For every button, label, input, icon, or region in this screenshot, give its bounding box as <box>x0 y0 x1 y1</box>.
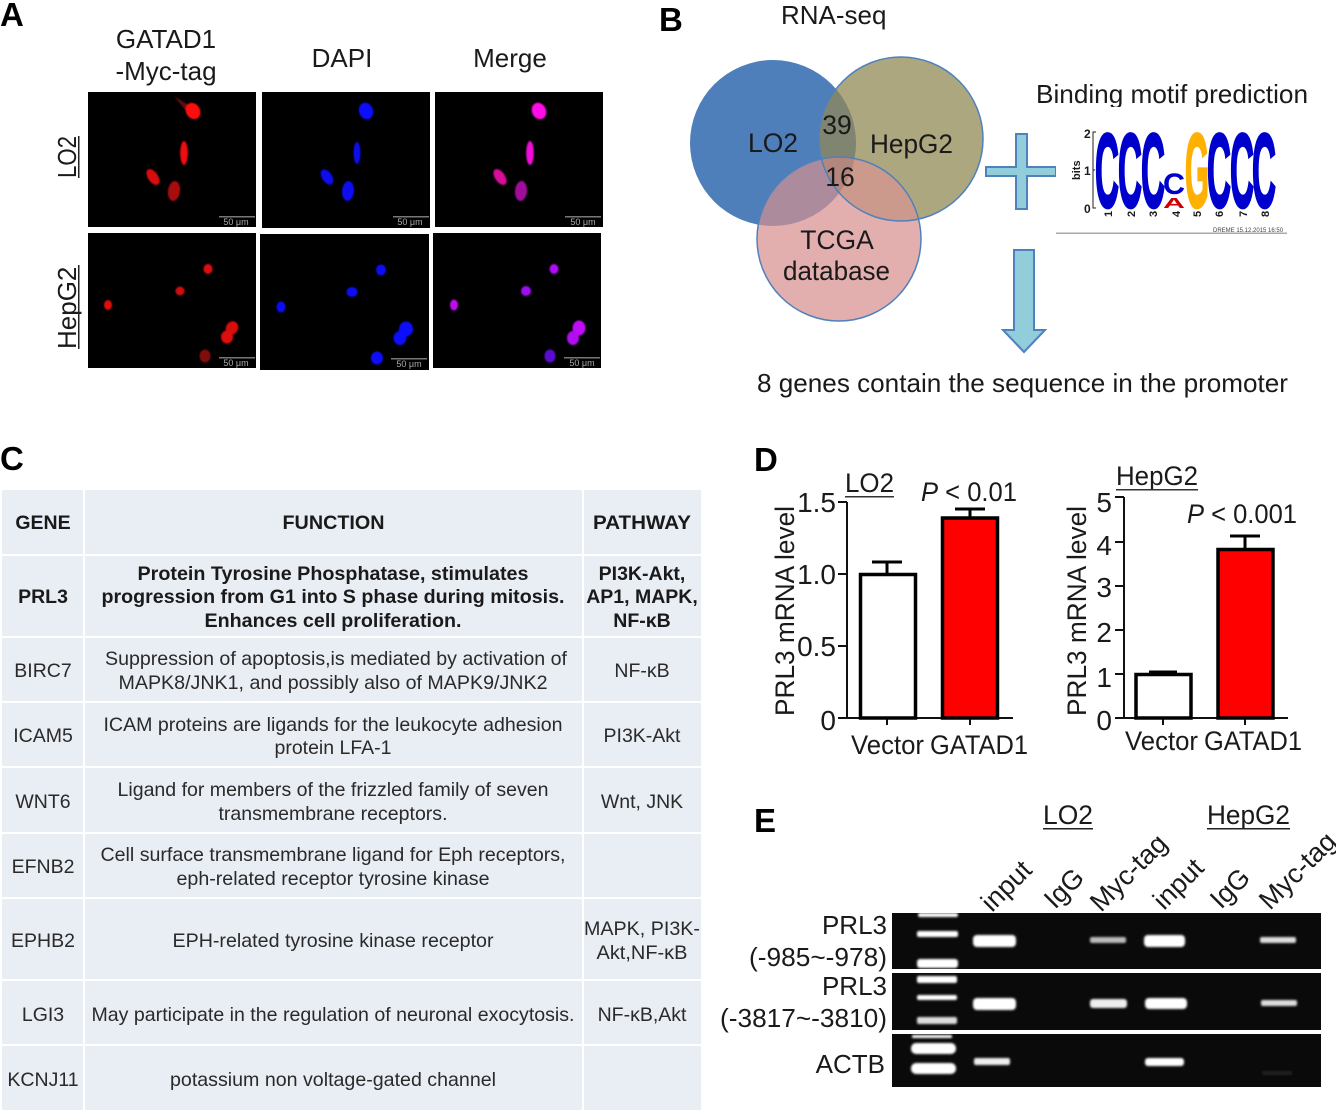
row EPHB2: MAPK, PI3K- <box>584 918 700 940</box>
bar chart LO2 <box>770 468 1028 760</box>
row ICAM5: protein LFA-1 <box>274 737 392 759</box>
row LGI3: NF-κB,Akt <box>598 1004 687 1026</box>
bar chart HepG2: GATAD1 <box>1204 726 1302 756</box>
micrograph LO2 Merge: 50 μm <box>570 217 596 227</box>
sequence logo: 0 <box>1084 202 1091 216</box>
micrograph HepG2 Merge: 50 μm <box>569 358 595 368</box>
bar chart LO2: PRL3 mRNA level <box>770 506 800 716</box>
row BIRC7: NF-κB <box>614 660 670 682</box>
bar chart HepG2: 5 <box>1096 487 1112 518</box>
sequence logo: G <box>1185 114 1209 230</box>
lane labels <box>975 826 1336 917</box>
row ICAM5: ICAM proteins are ligands for the leukocyte adhesion <box>104 714 562 736</box>
sequence logo: 5 <box>1192 211 1204 217</box>
row KCNJ11: potassium non voltage-gated channel <box>170 1069 496 1091</box>
sequence logo: C <box>1252 114 1276 230</box>
arrow down <box>1003 250 1045 352</box>
row label LO2: LO2 <box>52 136 82 178</box>
panel D: bar charts <box>754 441 1302 760</box>
row LGI3: LGI3 <box>22 1004 64 1026</box>
Venn labels <box>748 110 953 286</box>
row EFNB2: EFNB2 <box>12 856 74 878</box>
micrograph HepG2 GATAD1 <box>88 233 256 368</box>
gel row labels: ACTB <box>816 1049 885 1079</box>
bar chart LO2: P < 0.01 <box>921 477 1017 507</box>
table header row: PATHWAY <box>593 512 691 534</box>
row BIRC7: BIRC7 <box>14 660 72 682</box>
sequence logo: DREME 15.12.2015 16:50 <box>1213 228 1284 234</box>
row ICAM5: ICAM5 <box>13 725 73 747</box>
micrograph LO2 DAPI: 50 μm <box>397 217 423 227</box>
row PRL3: Protein Tyrosine Phosphatase, stimulates <box>138 563 529 585</box>
row PRL3 <box>18 563 698 632</box>
row LGI3: May participate in the regulation of neuronal exocytosis. <box>92 1004 574 1026</box>
bar chart LO2: GATAD1 <box>930 730 1028 760</box>
sequence logo: C <box>1141 114 1165 230</box>
group labels: LO2 <box>1043 800 1093 830</box>
bar chart LO2: 0 <box>820 705 836 736</box>
row BIRC7: MAPK8/JNK1, and possibly also of MAPK9/JNK2 <box>118 672 548 694</box>
group labels <box>1043 800 1290 830</box>
Venn labels: TCGA <box>800 225 874 255</box>
row BIRC7 <box>14 648 670 694</box>
row PRL3: AP1, MAPK, <box>586 586 698 608</box>
row EPHB2: EPH-related tyrosine kinase receptor <box>172 930 494 952</box>
sequence logo: 7 <box>1238 211 1250 217</box>
lane labels: input <box>1147 852 1210 915</box>
row PRL3: NF-κB <box>613 610 671 632</box>
table cell backgrounds <box>2 490 701 1110</box>
sequence logo: C <box>1163 168 1185 201</box>
sequence logo: A <box>1163 194 1185 211</box>
sequence logo: bits <box>1071 160 1083 180</box>
icon: plus <box>986 134 1056 209</box>
micrograph LO2 GATAD1 <box>88 92 256 227</box>
gel row labels <box>720 910 887 1079</box>
bar chart HepG2: 3 <box>1096 572 1112 603</box>
sequence logo: 2 <box>1126 211 1138 217</box>
bar chart LO2: LO2 <box>845 468 894 498</box>
bar chart LO2: Vector <box>851 730 924 760</box>
panel B: Venn and motif <box>659 0 1308 398</box>
bar chart HepG2 <box>1062 461 1302 756</box>
Venn labels: LO2 <box>748 128 798 158</box>
sequence logo: C <box>1095 114 1119 230</box>
lane labels: IgG <box>1038 862 1090 914</box>
table header row: GENE <box>15 512 71 534</box>
panel letter B: B <box>659 1 683 38</box>
row EPHB2: Akt,NF-κB <box>596 942 688 964</box>
gel 2 <box>892 973 1321 1030</box>
Venn labels: HepG2 <box>870 129 953 159</box>
group labels: HepG2 <box>1207 800 1290 830</box>
lane labels: IgG <box>1204 862 1256 914</box>
micrograph HepG2 DAPI <box>260 234 429 370</box>
row WNT6: WNT6 <box>15 791 71 813</box>
bar chart HepG2: 1 <box>1096 662 1112 693</box>
Venn labels: 39 <box>822 110 852 140</box>
micrograph HepG2 Merge <box>433 233 601 368</box>
panel E: ChIP gels <box>720 800 1336 1087</box>
micrograph HepG2 GATAD1: 50 μm <box>223 358 249 368</box>
gel row labels: (-3817~-3810) <box>720 1003 887 1033</box>
row ICAM5: PI3K-Akt <box>604 725 681 747</box>
table header row <box>15 512 691 534</box>
bar chart LO2: 1.0 <box>797 559 836 590</box>
row PRL3: PI3K-Akt, <box>599 563 685 585</box>
lane labels: Myc-tag <box>1084 828 1173 917</box>
row WNT6: transmembrane receptors. <box>218 803 448 825</box>
row EPHB2: EPHB2 <box>11 930 75 952</box>
sequence logo: 8 <box>1260 211 1272 217</box>
sequence logo: C <box>1230 114 1254 230</box>
row label HepG2: HepG2 <box>52 267 82 349</box>
micrograph HepG2 DAPI: 50 μm <box>396 359 422 369</box>
row ICAM5 <box>13 714 681 759</box>
bar chart LO2: 0.5 <box>797 631 836 662</box>
sequence logo: C <box>1207 114 1231 230</box>
sequence logo: C <box>1118 114 1142 230</box>
row WNT6 <box>15 779 683 825</box>
motif heading: Binding motif prediction <box>1036 79 1308 109</box>
row BIRC7: Suppression of apoptosis,is mediated by activation of <box>105 648 568 670</box>
gel row labels: (-985~-978) <box>749 942 887 972</box>
column headings: DAPI <box>312 43 372 73</box>
bar chart HepG2: HepG2 <box>1116 461 1198 491</box>
sequence logo: 6 <box>1214 211 1226 217</box>
lane labels: input <box>975 854 1038 917</box>
gel 1 <box>892 913 1321 969</box>
panel letter E: E <box>754 802 776 839</box>
gel 3 <box>892 1034 1321 1087</box>
sequence logo: 1 <box>1084 164 1091 178</box>
panel A: immunofluorescence <box>0 0 603 370</box>
row PRL3: Enhances cell proliferation. <box>204 610 462 632</box>
row EFNB2 <box>12 844 566 890</box>
bar chart HepG2: 4 <box>1096 530 1112 561</box>
gel row labels: PRL3 <box>822 910 887 940</box>
panel letter C: C <box>0 440 24 477</box>
column headings: Merge <box>473 43 547 73</box>
Venn labels: 16 <box>825 162 855 192</box>
gel row labels: PRL3 <box>822 971 887 1001</box>
sequence logo: 3 <box>1148 211 1160 217</box>
bar chart HepG2: PRL3 mRNA level <box>1062 506 1092 716</box>
sequence logo: 4 <box>1171 210 1183 217</box>
row WNT6: Wnt, JNK <box>601 791 683 813</box>
row PRL3: progression from G1 into S phase during mitosis. <box>102 586 564 608</box>
panel letter D: D <box>754 441 778 478</box>
column headings: -Myc-tag <box>115 56 217 86</box>
column headings <box>115 24 547 86</box>
row WNT6: Ligand for members of the frizzled family of seven <box>118 779 548 801</box>
Venn diagram <box>690 57 983 321</box>
row EFNB2: Cell surface transmembrane ligand for Eph receptors, <box>100 844 566 866</box>
bar chart HepG2: P < 0.001 <box>1187 499 1297 529</box>
row PRL3: PRL3 <box>18 586 68 608</box>
Venn labels: database <box>783 256 890 286</box>
micrograph LO2 DAPI <box>262 92 430 228</box>
sequence logo <box>1056 107 1287 234</box>
bar chart LO2: 1.5 <box>797 487 836 518</box>
row KCNJ11 <box>7 1069 496 1091</box>
micrograph LO2 Merge <box>435 92 603 227</box>
RNA-seq label: RNA-seq <box>781 0 886 30</box>
row EPHB2 <box>11 918 700 964</box>
micrograph LO2 GATAD1: 50 μm <box>223 217 249 227</box>
sequence logo: 2 <box>1084 127 1091 141</box>
row EFNB2: eph-related receptor tyrosine kinase <box>176 868 490 890</box>
sequence logo: 1 <box>1103 211 1115 217</box>
column headings: GATAD1 <box>116 24 216 54</box>
bar chart HepG2: 0 <box>1096 705 1112 736</box>
conclusion text: 8 genes contain the sequence in the promoter <box>757 368 1288 398</box>
bar chart HepG2: Vector <box>1125 726 1198 756</box>
bar chart HepG2: 2 <box>1096 617 1112 648</box>
table header row: FUNCTION <box>282 512 384 534</box>
panel C: gene table <box>0 440 701 1110</box>
row KCNJ11: KCNJ11 <box>7 1069 79 1091</box>
